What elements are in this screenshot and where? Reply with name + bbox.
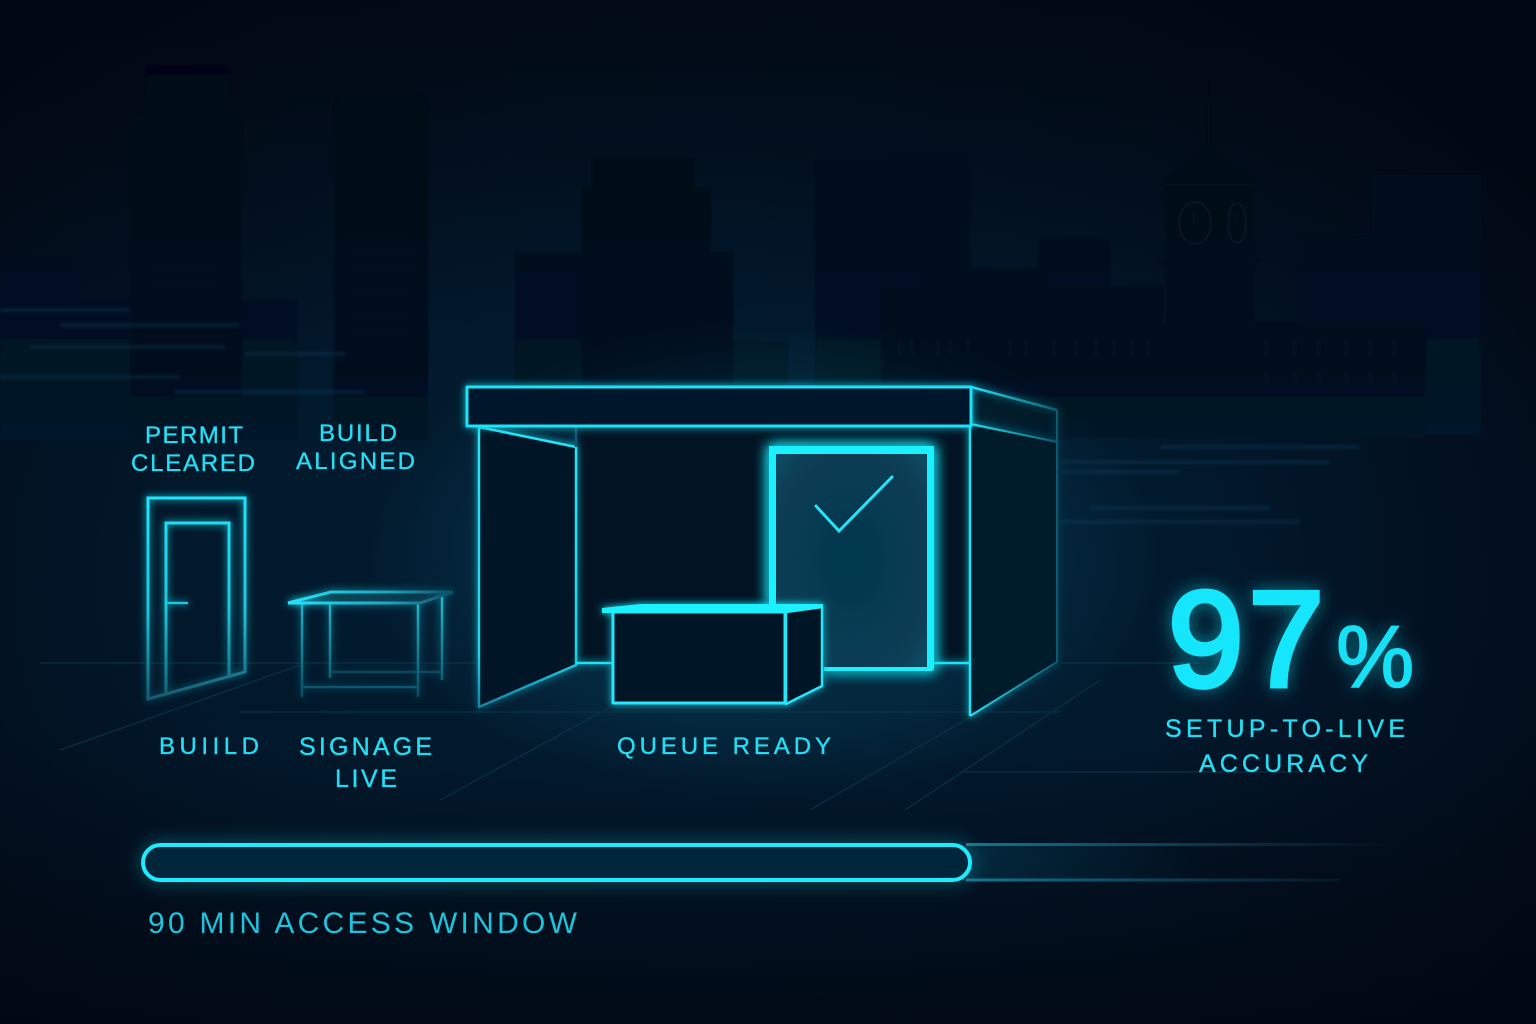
soft glow around booth [370,320,1170,800]
label: build: BUILD [319,420,397,447]
label: queue ready: QUEUE READY [617,733,831,760]
statistic caption: setup-to-live: SETUP-TO-LIVE [1165,715,1405,743]
label: buiild: BUIILD [159,733,259,760]
statistic: 97 percent [1168,563,1414,715]
booth back wall shade [576,427,970,663]
statistic: 97 percent: 97 [1168,563,1324,715]
checkmark [816,477,892,531]
label: signage: SIGNAGE [299,733,432,761]
label: cleared: CLEARED [131,450,255,477]
label: permit: PERMIT [145,422,243,449]
progress bar [143,845,970,880]
booth roof [467,387,971,426]
booth right side wall [970,387,1057,716]
city skyline silhouette [0,65,1481,443]
floor perspective lines [40,663,1300,810]
label: aligned: ALIGNED [296,448,415,475]
progress label: 90 MIN ACCESS WINDOW [148,907,578,940]
tower floor lines and clock faces [142,107,1246,332]
icon: permit door [148,498,245,699]
icon: reception counter [602,604,823,704]
icon: booth structure [467,387,1057,716]
building windows [897,340,1397,385]
booth left wing wall [479,427,576,707]
statistic: 97 percent: % [1336,607,1414,706]
booth floor edges [576,662,970,664]
door panel [776,454,927,667]
label: live: LIVE [335,765,397,793]
statistic caption: accuracy: ACCURACY [1199,750,1368,778]
progress track remainder [960,844,1400,880]
icon: signage table [288,592,453,697]
door frame [769,446,934,671]
horizontal light streaks [0,310,1360,522]
icon: door with checkmark [769,446,934,671]
